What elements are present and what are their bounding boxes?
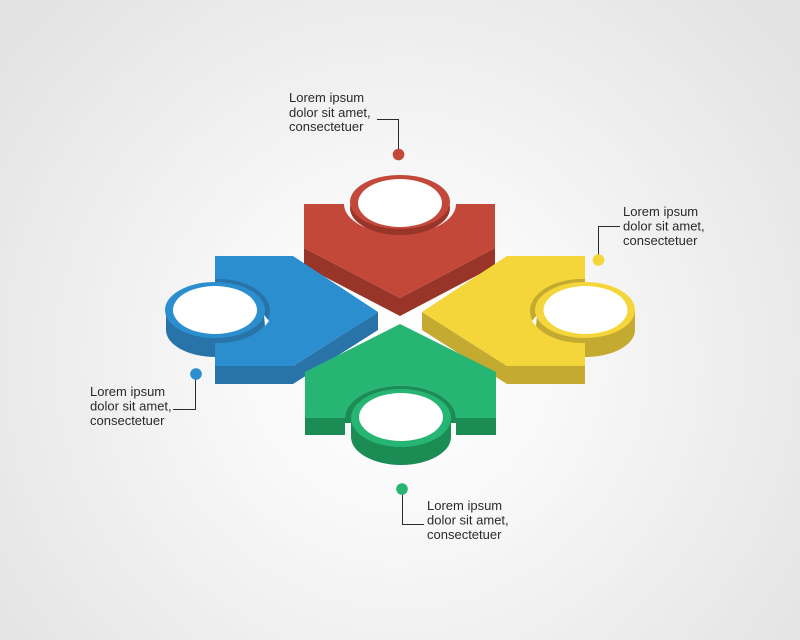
blue arrow top face — [215, 256, 378, 366]
red circle white centre — [358, 179, 442, 227]
yellow notch gap — [532, 315, 537, 326]
yellow leader line — [598, 226, 620, 256]
green dot — [396, 483, 408, 495]
blue circle white centre — [173, 286, 257, 334]
red label text: Lorem ipsum — [289, 90, 364, 105]
callout: red — [289, 90, 404, 160]
yellow circle rim — [535, 282, 635, 338]
blue arrow side — [215, 312, 378, 384]
blue cylinder side — [166, 310, 216, 357]
blue leader line — [173, 378, 196, 410]
green cylinder side — [351, 418, 451, 465]
blue dot — [190, 368, 202, 380]
blue label text: dolor sit amet, — [90, 398, 172, 414]
callout: blue — [90, 368, 202, 428]
yellow label text: consectetuer — [623, 233, 698, 248]
blue circle rim — [165, 282, 265, 338]
red arrow side — [304, 248, 495, 316]
green circle rim — [351, 389, 451, 447]
red circle rim — [350, 175, 450, 229]
red circle rim shadow — [350, 181, 450, 235]
blue notch gap — [264, 315, 269, 326]
yellow label text: Lorem ipsum — [623, 204, 698, 219]
green label text: consectetuer — [427, 527, 502, 542]
blue label text: consectetuer — [90, 413, 165, 428]
yellow label text: dolor sit amet, — [623, 218, 705, 234]
blue ring shadow — [215, 279, 270, 343]
green notch gaps — [345, 423, 456, 435]
red label text: consectetuer — [289, 119, 364, 134]
red leader line — [377, 120, 398, 150]
yellow ring shadow — [530, 279, 585, 343]
green ring shadow — [345, 386, 456, 423]
panel: blue arrow — [165, 256, 378, 384]
callout: yellow — [593, 204, 705, 266]
blue label text: Lorem ipsum — [90, 384, 165, 399]
green leader line — [402, 493, 424, 524]
panel: green arrow — [305, 324, 496, 465]
yellow dot — [593, 254, 604, 266]
red arrow top face — [304, 204, 495, 298]
yellow circle white centre — [544, 286, 628, 334]
panel: yellow arrow — [422, 256, 635, 384]
green arrow side — [305, 418, 496, 435]
panel: red arrow — [304, 175, 495, 316]
callout: green — [396, 483, 509, 542]
green arrow top face — [305, 324, 496, 418]
red dot — [393, 149, 404, 160]
red label text: dolor sit amet, — [289, 105, 371, 120]
yellow arrow top face — [422, 256, 585, 366]
yellow arrow side — [422, 312, 585, 384]
green label text: dolor sit amet, — [427, 512, 509, 528]
yellow cylinder side — [585, 310, 635, 357]
green label text: Lorem ipsum — [427, 498, 502, 513]
green circle white centre — [359, 393, 443, 441]
